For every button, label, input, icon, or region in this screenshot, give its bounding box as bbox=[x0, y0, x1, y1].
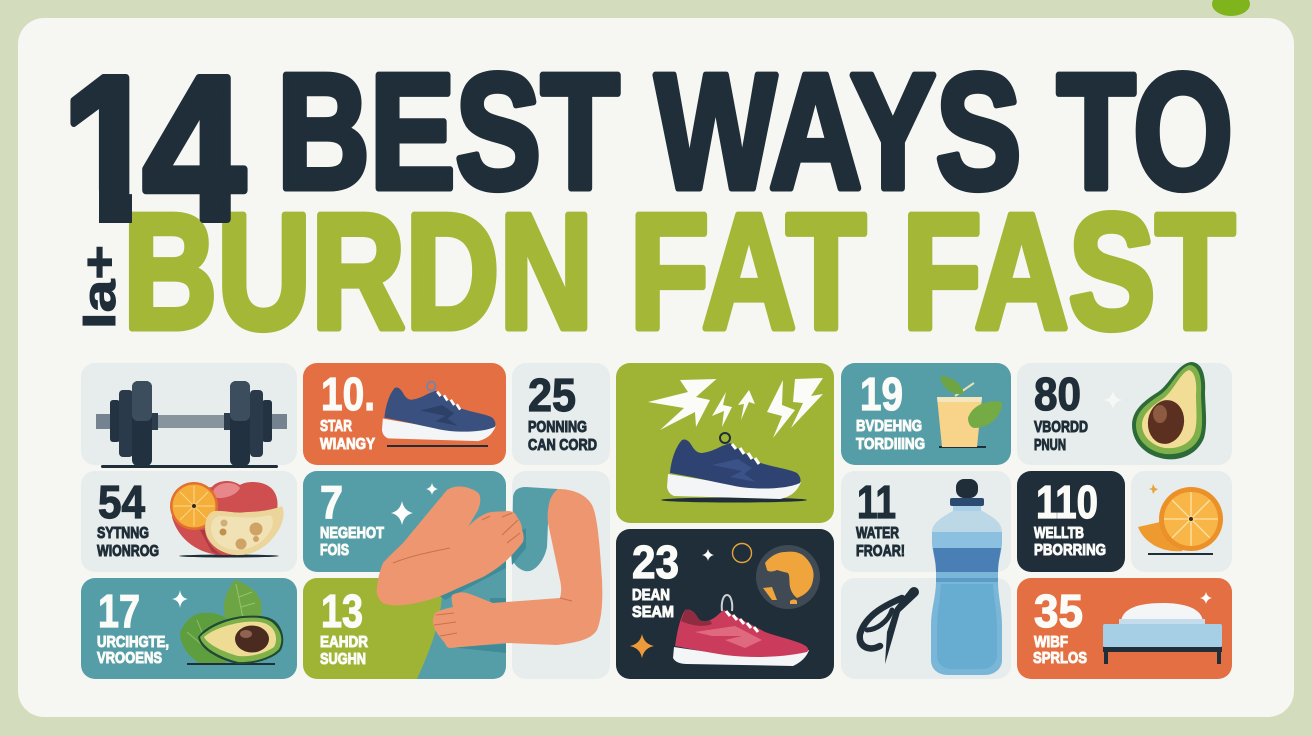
text: 35: 35 bbox=[1034, 585, 1083, 637]
panel: 23 bbox=[616, 529, 834, 679]
panel: 10 bbox=[303, 363, 506, 465]
text: 11: WATER bbox=[856, 525, 899, 542]
text: 13: 13 bbox=[321, 585, 363, 637]
text: 110: 110 bbox=[1036, 476, 1098, 528]
panel: orange slice bbox=[1131, 471, 1232, 572]
text: 25 bbox=[528, 369, 597, 454]
title number 4: 4 bbox=[143, 34, 245, 263]
text: 25: PONNING bbox=[528, 419, 587, 436]
panel: 17 bbox=[81, 578, 297, 679]
text: 11: 11 bbox=[857, 476, 896, 528]
illustration: crossed arms bbox=[377, 486, 602, 653]
panel: 7 bbox=[303, 471, 506, 572]
icon: dumbbell bbox=[96, 381, 287, 468]
icon: stars and ring bbox=[630, 544, 752, 658]
text: 10 bbox=[320, 368, 375, 453]
shirt shadows bbox=[440, 520, 526, 653]
text: 80 bbox=[1034, 368, 1088, 454]
text: 23: 23 bbox=[632, 536, 679, 588]
text: 19: 19 bbox=[860, 368, 903, 420]
text: 17: 17 bbox=[98, 585, 140, 637]
text: 10: STAR bbox=[320, 418, 352, 435]
text: 110 bbox=[1034, 476, 1106, 559]
panel: 80 bbox=[1017, 362, 1232, 465]
icon: bed bbox=[1103, 603, 1222, 664]
text: 23 bbox=[632, 536, 679, 621]
panel: dumbbell bbox=[81, 363, 297, 468]
left arm bbox=[377, 486, 524, 605]
text: 11: FROAR! bbox=[856, 543, 905, 560]
panel: 19 bbox=[841, 363, 1011, 465]
icon: water bottle bbox=[931, 479, 1002, 675]
icon: lightning bolts bbox=[648, 378, 823, 438]
text: 80: VBORDD bbox=[1034, 419, 1088, 436]
teal shirt section bbox=[417, 560, 506, 679]
panel: 25 bbox=[512, 363, 610, 465]
icon: juice glass bbox=[937, 376, 1002, 448]
text: 25: 25 bbox=[528, 369, 576, 421]
text: 17: URCIHGTE, bbox=[97, 634, 169, 651]
panel: lightning shoe bbox=[616, 363, 834, 523]
icon: planet bbox=[756, 545, 820, 609]
icon: scribble mark bbox=[860, 587, 919, 664]
title bbox=[70, 70, 1236, 334]
icon: blue shoe bbox=[382, 382, 496, 447]
text: 23: SEAM bbox=[632, 604, 674, 621]
rotated small mark: Ia+ bbox=[73, 245, 125, 329]
right arm bbox=[433, 489, 602, 648]
icon: avocado half bbox=[1132, 362, 1206, 459]
text: 19: TORDIIING bbox=[856, 436, 925, 453]
text: 35: SPRLOS bbox=[1033, 650, 1087, 667]
text: 13: EAHDR bbox=[320, 634, 368, 651]
text: 35: WIBF bbox=[1034, 634, 1068, 651]
icon: sparkle bbox=[1103, 390, 1123, 410]
panel: 35 bbox=[1017, 578, 1232, 679]
panel: arm background bbox=[512, 471, 610, 679]
text: 54: SYTNNG bbox=[97, 525, 149, 542]
panel: 13 bbox=[303, 560, 506, 679]
text: 13 bbox=[320, 585, 368, 668]
text: 54: WIONROG bbox=[97, 543, 159, 560]
text: 80: PNUN bbox=[1034, 437, 1066, 454]
text: 35 bbox=[1033, 585, 1087, 667]
panel: 110 bbox=[1017, 471, 1125, 572]
text: 10: WIANGY bbox=[320, 436, 375, 453]
text: 23: DEAN bbox=[632, 587, 670, 604]
teal shirt sleeve bbox=[512, 487, 558, 571]
text: 54 bbox=[97, 476, 159, 560]
text: 7: 7 bbox=[320, 476, 343, 528]
icon: navy shoe bbox=[661, 433, 807, 502]
text: 110: PBORRING bbox=[1034, 542, 1106, 559]
text: 7: NEGEHOT bbox=[320, 525, 384, 542]
icon: fruit group bbox=[170, 481, 284, 558]
text: 11 bbox=[856, 476, 905, 560]
text: 80: 80 bbox=[1034, 368, 1081, 420]
text: 7: FOIS bbox=[320, 542, 349, 559]
text: 25: CAN CORD bbox=[528, 437, 597, 454]
text: 10: 10. bbox=[321, 368, 375, 420]
text: 19: BVDEHNG bbox=[856, 418, 922, 435]
icon: red shoe bbox=[673, 595, 809, 666]
icon: sparkles bbox=[391, 483, 438, 525]
icon: orange slices bbox=[1138, 484, 1223, 555]
text: 7 bbox=[320, 476, 384, 559]
icon: sparkle bbox=[172, 590, 188, 608]
panel: 54 bbox=[81, 471, 297, 572]
panel: scribble icon bbox=[841, 578, 1011, 679]
icon: sparkle bbox=[1200, 592, 1212, 604]
title number 1: 1 bbox=[62, 34, 158, 263]
text: 13: SUGHN bbox=[320, 651, 366, 668]
text: 19 bbox=[856, 368, 925, 453]
text: 110: WELLTB bbox=[1034, 525, 1084, 542]
panel: 11 bbox=[841, 471, 1011, 572]
arm detail lines bbox=[393, 513, 572, 636]
text: 17 bbox=[97, 585, 169, 667]
icon: avocado with leaves bbox=[180, 580, 283, 665]
green glow at top edge bbox=[1212, 0, 1250, 16]
text: 17: VROOENS bbox=[97, 650, 162, 667]
text: 54: 54 bbox=[98, 476, 145, 528]
